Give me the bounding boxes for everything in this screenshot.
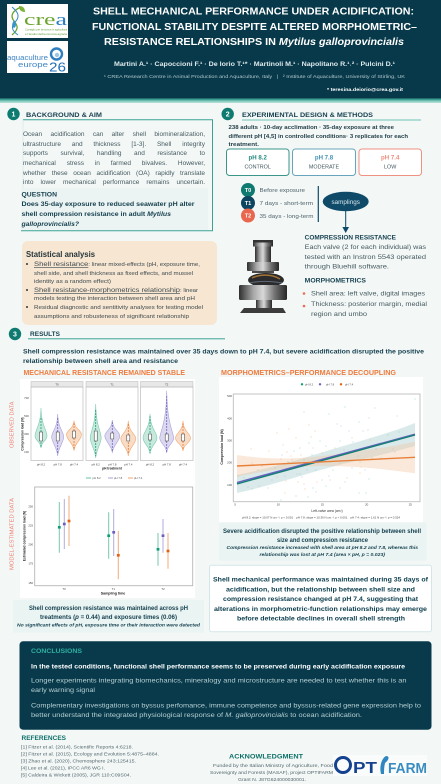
chart: violin plots of observed data: pH 7.4	[179, 462, 188, 466]
compression resistance text: Each valve (2 for each individual) was	[305, 244, 426, 251]
logo: Aquaculture Europe 26: aquaculture	[7, 55, 48, 62]
background paragraph: mechanical stress in farmed bivalves. However,	[23, 160, 205, 167]
violin legend	[86, 476, 143, 480]
scatter legend	[301, 382, 354, 386]
confidence bands	[237, 423, 415, 493]
chart: violin plots of observed data: Compression load (N)	[20, 417, 24, 451]
chart: scatter of compression load against shell area: 15	[321, 502, 324, 506]
chart: scatter of compression load against shell area: 20	[365, 502, 369, 506]
caption: acidification disrupted relationship	[219, 523, 427, 561]
samplings bubble	[323, 192, 369, 211]
card: pH 8.2 control: CONTROL	[245, 164, 271, 170]
chart: scatter of compression load against shell area: 500	[227, 394, 232, 398]
references: [2] Fitzer et al. (2015), Ecology and Evolution 5:4875–4884.	[21, 752, 159, 757]
heading: morphometrics decoupling: MORPHOMETRICS–PERFORMANCE DECOUPLING	[221, 368, 396, 377]
logo: OPTIFARM: PT	[353, 760, 377, 777]
background paragraph: whether these ocean acidification (OA) rapidly translate	[23, 170, 205, 177]
icon: compression testing machine	[239, 240, 287, 313]
caption: acidification disrupted relationship: relationship was lost at pH 7.4 (area × pH, p = 0.023)	[260, 552, 385, 558]
arrow: samplings to tests	[343, 211, 348, 232]
logo: CREA: Consiglio per la ricerca in agricoltura	[25, 28, 67, 32]
experimental design summary: different pH [4,5] in controlled conditions· 3 replicates for each	[228, 134, 409, 140]
card: pH 8.2 control: pH 8.2	[249, 154, 267, 162]
violin legend: pH 7.4	[134, 476, 143, 480]
chart: violin plots of observed data: pH 7.4	[124, 462, 133, 466]
section 3 heading: results: RESULTS	[30, 331, 61, 338]
title: RESISTANCE RELATIONSHIPS IN Mytilus galloprovincialis	[104, 37, 404, 48]
chart: violin plots of observed data: pH 7.8	[54, 462, 62, 466]
chart: violin plots of observed data: pH 8.2	[146, 462, 155, 466]
sampling timeline	[241, 183, 319, 222]
research question: galloprovincialis?	[20, 221, 79, 228]
future work text: Longer experiments integrating biomechanics, mineralogy and microstructure are needed to test whether this is an	[31, 678, 407, 685]
chart: model-estimated compression load: 150	[28, 581, 33, 585]
statistical methods list: assumptions and robusteness of significant relationship	[34, 314, 189, 320]
card: pH 7.4 low: pH 7.4	[381, 154, 400, 162]
morphometrics text: Thickness: posterior margin, medial	[311, 301, 427, 308]
callout: key finding: before detectable declines in overall shell strength	[237, 616, 405, 622]
future work text: better understand the integrated physiological response of M. galloprovincialis to ocean acidification.	[31, 712, 362, 719]
compression resistance text: tested with an Instron 5543 operated	[305, 254, 427, 261]
callout: key finding: alterations in morphometric-function relationships may emerge	[214, 606, 427, 613]
side label: observed data: OBSERVED DATA	[10, 401, 16, 448]
violins	[35, 391, 190, 458]
chart: model-estimated compression load: 225	[28, 523, 33, 527]
compression resistance text: through Bluehill software.	[305, 264, 389, 270]
caption: compression resistance maintained: No significant effects of pH, exposure time or their interaction were detected	[17, 622, 201, 628]
logo: OPTIFARM: FARM	[388, 760, 427, 777]
card: pH 7.4 low	[359, 149, 422, 176]
callout: key finding: compression resistance changed at pH 7.4, suggesting that	[223, 596, 419, 603]
chart: scatter of compression load against shell area: pH 8.2: slope = 10.07 N cm⁻², p < 0.001 pH 7.8: slope = 10.36 N cm⁻², p < 0.001 pH 7.4: slope = 1.61 N cm⁻², p = 0.524	[242, 516, 401, 520]
chart: model-estimated compression load: 250	[28, 505, 33, 509]
chart: scatter of compression load against shell area: 100	[227, 483, 232, 487]
chart: violin plots of observed data	[20, 379, 195, 598]
chart: scatter of compression load against shell area	[219, 377, 423, 522]
callout: key finding	[210, 565, 432, 632]
references: REFERENCES	[22, 735, 66, 742]
acknowledgment	[210, 753, 334, 782]
logo: CREA: cre a	[24, 10, 68, 29]
results summary	[23, 348, 424, 365]
references: [4] Lee et al. (2021), IPCC AR6 WG I.	[21, 766, 105, 771]
chart: scatter of compression load against shell area: Left-valve area (cm²)	[311, 509, 343, 513]
chart: violin plots of observed data: pH 7.4	[70, 462, 79, 466]
logo: Aquaculture Europe 26: 26	[49, 60, 66, 74]
future work text: early warning signal	[31, 687, 96, 694]
violin legend: pH 7.8	[114, 476, 123, 480]
chart: violin plots of observed data: 700	[24, 396, 29, 400]
title	[92, 6, 417, 48]
section 2: experimental design	[222, 108, 427, 318]
future work text: Complementary investigations on byssus perfomance, immune competence and byssus-related gene expression help to	[31, 702, 421, 709]
acknowledgment: Funded by the Italian Ministry of Agriculture, Food	[213, 763, 334, 768]
logo: CREA: e l'analisi dell'economia agraria	[25, 32, 67, 36]
card: pH 7.4 low: LOW	[384, 164, 397, 170]
chart: model-estimated compression load: Estimated compression load (N)	[22, 511, 26, 561]
morphometrics text: MORPHOMETRICS	[305, 278, 366, 284]
chart: violin plots of observed data: 500	[24, 414, 29, 418]
acknowledgment: Sovereignty and Forests (MASAF), project OPTIFARM	[210, 770, 333, 775]
future work text	[31, 678, 421, 719]
panel: conclusions	[20, 641, 432, 730]
caption: compression resistance maintained: treatments (p = 0.44) and exposure times (0.06)	[40, 615, 177, 621]
chart: violin plots of observed data: pH 7.8	[163, 462, 171, 466]
logo: OPTIFARM	[333, 755, 427, 777]
heading: statistical analysis: Statistical analysis	[26, 250, 96, 259]
references: [3] Zhao et al. (2020), Chemosphere 243:125415.	[21, 759, 136, 764]
header band	[0, 0, 441, 103]
violin legend: pH 8.2	[92, 476, 101, 480]
heading: background and aim: BACKGROUND & AIM	[26, 112, 102, 119]
chart: scatter of compression load against shell area: 10	[277, 502, 280, 506]
references	[21, 735, 159, 778]
caption: compression resistance maintained	[13, 600, 204, 632]
logo: Aquaculture Europe 26	[7, 41, 68, 74]
badge 2	[222, 108, 234, 120]
references: [1] Fitzer et al. (2014), Scientific Reports 4:6218.	[21, 745, 133, 750]
scatter legend: pH 7.8	[326, 382, 335, 386]
morphometrics text: region and umbo	[311, 311, 368, 318]
callout: key finding: acidification, but the relationship between shell size and	[226, 586, 415, 594]
chart: violin plots of observed data: pH 7.8	[108, 462, 117, 466]
statistical methods list: Residual diagnostic and sentitivity analyses for testing model	[34, 305, 203, 311]
chart: scatter of compression load against shell area: Compression load (N)	[220, 429, 224, 465]
samplings bubble: samplings	[332, 199, 360, 206]
chart: model-estimated compression load	[22, 487, 193, 596]
heading: experimental design and methods: EXPERIMENTAL DESIGN & METHODS	[242, 112, 374, 119]
scatter points	[238, 399, 415, 500]
sampling timeline: 35 days - long-term	[260, 214, 314, 220]
card: pH 8.2 control	[226, 149, 289, 176]
contact email: * teresina.deiorio@crea.gov.it	[327, 87, 403, 93]
experimental design summary	[228, 125, 409, 148]
background paragraph: supports survival, handling and resistance to	[23, 150, 205, 157]
chart: violin plots of observed data: pH 8.2	[92, 462, 100, 466]
statistical methods list: models testing the interaction between shell area and pH	[34, 296, 195, 302]
acknowledgment: ACKNOWLEDGMENT	[229, 753, 304, 760]
results summary: Shell compression resistance was maintained over 35 days down to pH 7.4, but severe acidification disrupted the positive	[23, 348, 424, 356]
chart: scatter of compression load against shell area: 300	[227, 439, 232, 443]
chart: model-estimated compression load: Sampling time	[101, 592, 125, 596]
caption: acidification disrupted relationship: Severe acidification disrupted the positive relationship between shell	[223, 529, 421, 535]
key conclusion: In the tested conditions, functional shell performance seems to be preserved during early acidification exposure	[31, 663, 405, 670]
compression resistance text: COMPRESSION RESISTANCE	[305, 234, 396, 242]
statistical methods list	[26, 261, 203, 320]
card: pH 7.8 moderate: pH 7.8	[315, 154, 334, 162]
title: SHELL MECHANICAL PERFORMANCE UNDER ACIDIFICATION:	[93, 6, 414, 17]
morphometrics text: Shell area: left valve, digital images	[311, 290, 425, 298]
chart: scatter of compression load against shell area: 200	[227, 461, 232, 465]
background paragraph: into lower mechanical performance remains uncertain.	[23, 179, 205, 186]
sampling timeline: Before exposure	[260, 188, 305, 194]
references: [5] Caldeira & Wickett (2005), JGR 110:C09S04.	[21, 773, 131, 778]
background paragraph	[23, 130, 207, 190]
chart: model-estimated compression load: 200	[28, 543, 33, 547]
statistical methods list: Shell resistance : linear mixed-effects (pH, exposure time,	[34, 261, 200, 268]
regression lines	[237, 434, 415, 484]
research question: QUESTION	[22, 192, 57, 198]
chart: violin plots of observed data: 100	[24, 450, 29, 454]
chart: model-estimated compression load: T2	[161, 587, 165, 591]
chart: violin plots of observed data: pH 8.2	[37, 462, 46, 466]
logo: CREA	[7, 4, 68, 38]
research question: shell compression resistance in adult Mytilus	[22, 211, 171, 218]
panel: background box	[21, 120, 212, 231]
section 1: background and aim	[7, 108, 212, 231]
box plots and jittered points	[40, 396, 184, 456]
side label: model-estimated data: MODEL-ESTIMATED DATA	[10, 498, 16, 570]
panel: statistical analysis	[22, 241, 217, 325]
chart: model-estimated compression load: 175	[28, 562, 33, 566]
card: pH 7.8 moderate: MODERATE	[309, 164, 339, 170]
background paragraph: Ocean acidification can alter shell biomineralization,	[23, 131, 205, 138]
background paragraph: ultrastructure and thickness [1-3]. Shell integrity	[23, 141, 205, 148]
authors: Martini A.¹ · Capoccioni F.¹ · De Iorio T.¹* · Martinoli M.¹ · Napolitano R.¹˒² · Pulcini D.¹	[114, 61, 395, 68]
experimental design summary: 238 adults · 10-day acclimation · 35-day exposure at three	[228, 125, 394, 131]
chart: scatter of compression load against shell area: 400	[227, 416, 232, 420]
results summary: relationship between shell area and resistance	[23, 358, 178, 365]
chart: violin plots of observed data: T2	[165, 382, 169, 386]
experimental design summary: treatment.	[228, 142, 259, 148]
callout: key finding: Shell mechanical performance was maintained during 35 days of	[213, 577, 429, 584]
scatter legend: pH 7.4	[345, 382, 354, 386]
badge 1	[7, 108, 20, 120]
badge 2: 2	[226, 112, 230, 119]
caption: compression resistance maintained: Shell compression resistance was maintained across pH	[29, 606, 188, 612]
logo: Aquaculture Europe 26: europe	[18, 62, 48, 69]
chart: violin plots of observed data: T0	[55, 382, 59, 386]
sampling timeline: T2	[245, 214, 251, 220]
section 3 heading: results: 3	[13, 332, 17, 339]
chart: scatter of compression load against shell area: 5	[234, 502, 236, 506]
statistical methods list: shell side, and shell thickness as fixed effects, and mussel	[34, 271, 193, 277]
section 3 heading: results	[9, 328, 225, 340]
badge 1: 1	[12, 112, 16, 119]
caption: acidification disrupted relationship: size and compression resistance	[277, 538, 369, 544]
statistical methods list: identity as a random effect)	[34, 279, 111, 285]
chart: violin plots of observed data: T1	[110, 382, 114, 386]
morphometrics text	[303, 278, 427, 318]
research question	[20, 192, 195, 228]
chart: violin plots of observed data: pH treatment	[102, 466, 123, 470]
chart: violin plots of observed data: 300	[24, 432, 29, 436]
sampling timeline: 7 days - short-term	[260, 201, 314, 207]
sampling timeline: T1	[245, 201, 251, 207]
affiliations: ¹ CREA Research Centre in Animal Production and Aquaculture, Italy | ² Institute of Aquaculture, University of Stirling, UK	[104, 74, 406, 79]
compression resistance text	[305, 234, 427, 270]
sampling timeline: T0	[245, 188, 251, 194]
statistical methods list: Shell resistance-morphometrics relationship : linear	[34, 287, 198, 294]
chart: scatter of compression load against shell area: 25	[409, 502, 412, 506]
research question: Does 35-day exposure to reduced seawater pH alter	[22, 201, 195, 208]
chart: model-estimated compression load: T0	[62, 587, 66, 591]
heading: mechanical resistance: MECHANICAL RESISTANCE REMAINED STABLE	[24, 368, 185, 377]
title: FUNCTIONAL STABILITY DESPITE ALTERED MORPHOMETRIC–	[92, 22, 417, 33]
scatter legend: pH 8.2	[305, 382, 314, 386]
card: pH 7.8 moderate	[292, 149, 356, 176]
caption: acidification disrupted relationship: Compression resistance increased with shell area at pH 8.2 and 7.8, whereas this	[226, 545, 418, 551]
heading: conclusions: CONCLUSIONS	[31, 648, 82, 655]
chart: model-estimated compression load: T1	[112, 587, 115, 591]
acknowledgment: Grant N. J87G624000030001.	[238, 777, 306, 782]
